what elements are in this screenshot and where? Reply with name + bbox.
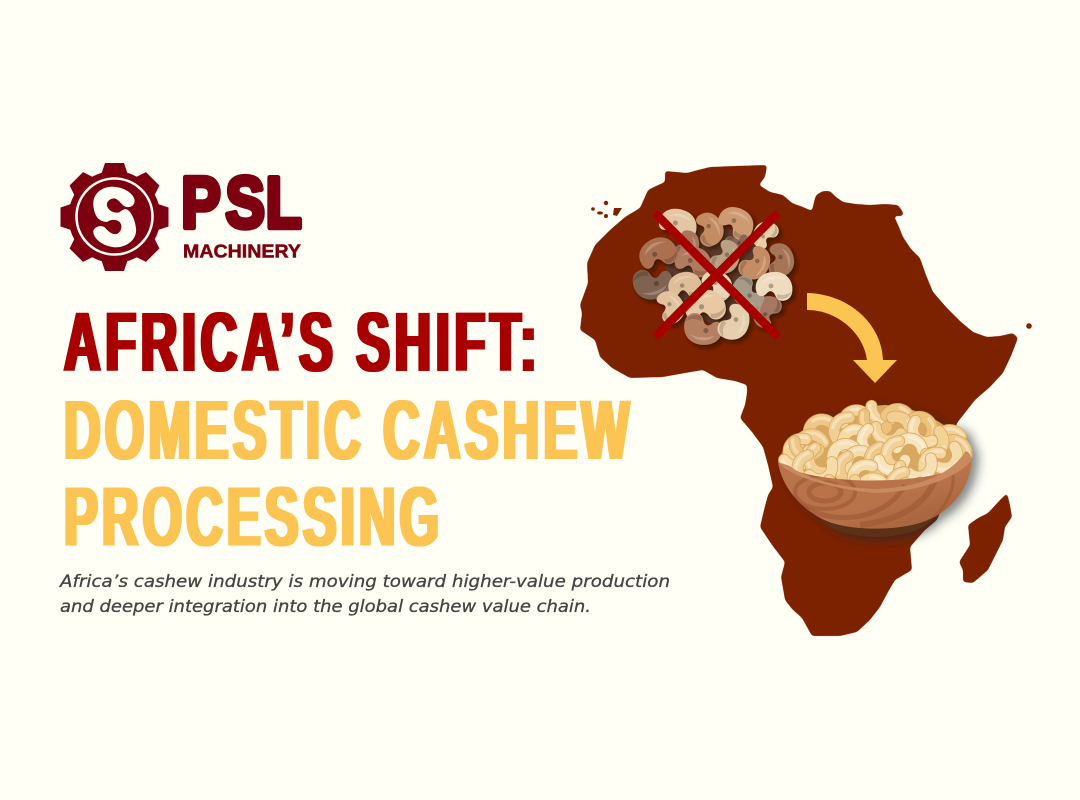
subtitle: and deeper integration into the global cashew value chain. [60, 597, 591, 617]
subtitle [59, 572, 670, 617]
map of Africa [580, 165, 1032, 636]
title [64, 295, 629, 564]
bowl of processed cashews [778, 404, 972, 537]
bowl foot [820, 516, 935, 537]
cashew mound [782, 404, 972, 498]
bowl back rim [778, 432, 972, 483]
title line 2: DOMESTIC CASHEW [64, 383, 629, 477]
title line 3: PROCESSING [64, 469, 439, 564]
logo [60, 162, 302, 271]
wood grain [795, 475, 953, 525]
logo wordmark: MACHINERY: MACHINERY [183, 242, 301, 262]
bowl front rim [778, 451, 972, 493]
subtitle: Africa’s cashew industry is moving toward higher-value production [59, 572, 670, 592]
red cross over raw cashews [655, 213, 778, 337]
Madagascar [959, 493, 1012, 583]
arrow [807, 293, 897, 383]
icon: gear emblem [60, 163, 168, 271]
raw cashew pile [631, 201, 797, 348]
small islands [591, 201, 1032, 329]
logo wordmark: PSL: PSL [181, 162, 302, 243]
title line 1: AFRICA’S SHIFT: [64, 295, 537, 389]
bowl body [778, 460, 972, 529]
